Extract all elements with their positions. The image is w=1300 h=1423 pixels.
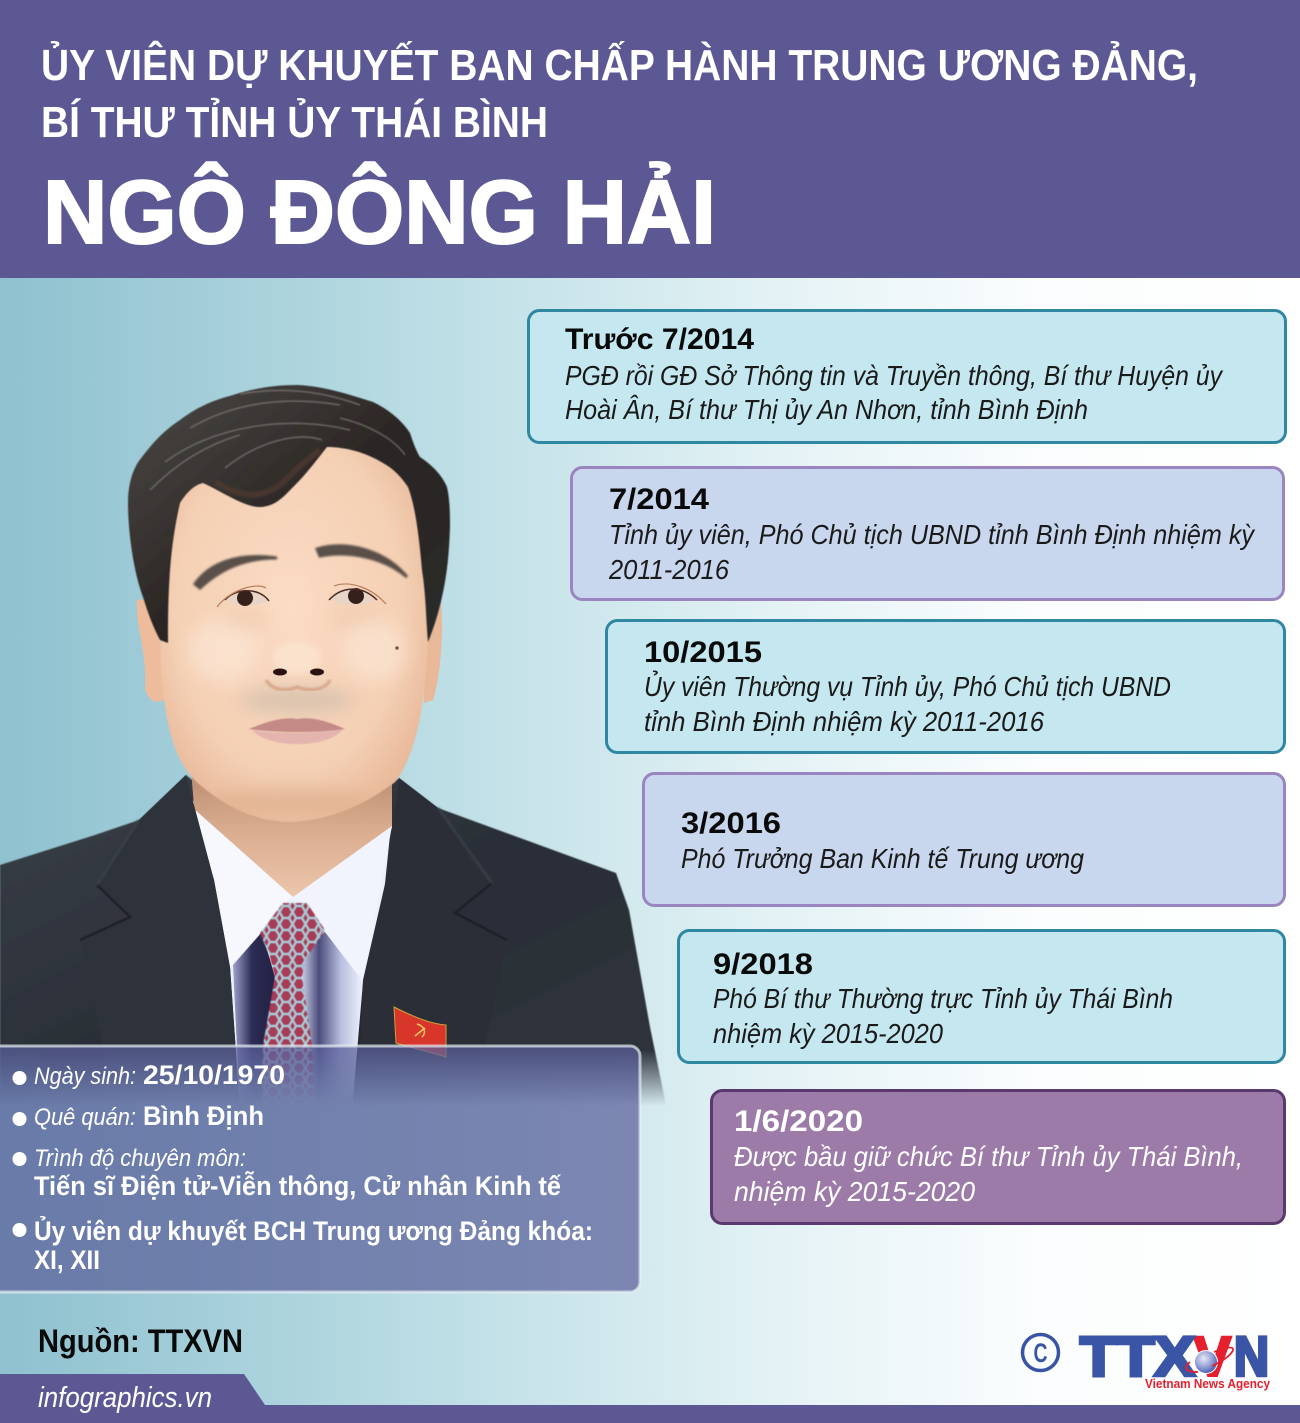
panel: 9/2018: Phó Bí thư Thường trực Tỉnh ủy Thái Bình xyxy=(713,983,1173,1014)
nose xyxy=(266,642,330,690)
logo: TTXVN: TTX xyxy=(1080,1324,1195,1388)
home town: Bình Định xyxy=(143,1101,264,1131)
face xyxy=(161,430,428,822)
lapels xyxy=(138,775,237,1064)
subtitle: BÍ THƯ TỈNH ỦY THÁI BÌNH xyxy=(41,96,548,147)
panel: 10/2015 xyxy=(606,620,1284,752)
party flag pin xyxy=(394,1007,446,1057)
shirt xyxy=(192,800,392,1110)
source credit: Nguồn: TTXVN xyxy=(38,1323,243,1359)
eyes xyxy=(217,584,386,607)
education: Trình độ chuyên môn: xyxy=(34,1145,246,1172)
panel: 3/2016 xyxy=(644,774,1284,906)
panel: 9/2018 xyxy=(678,930,1284,1062)
panel: before 7/2014 xyxy=(528,310,1286,442)
central committee term: Ủy viên dự khuyết BCH Trung ương Đảng khóa: xyxy=(34,1214,593,1246)
panel: 3/2016: 3/2016 xyxy=(681,807,781,840)
panel: 10/2015: tỉnh Bình Định nhiệm kỳ 2011-2016 xyxy=(644,706,1044,737)
facial shading xyxy=(188,610,405,814)
panel: before 7/2014: Hoài Ân, Bí thư Thị ủy An Nhơn, tỉnh Bình Định xyxy=(565,394,1088,425)
neck xyxy=(191,770,392,897)
panel: 1/6/2020: nhiệm kỳ 2015-2020 xyxy=(734,1176,975,1207)
home town xyxy=(12,1101,264,1131)
central committee term xyxy=(12,1214,593,1275)
education xyxy=(12,1145,562,1201)
necktie xyxy=(260,903,325,1110)
education: Tiến sĩ Điện tử-Viễn thông, Cử nhân Kinh tế xyxy=(34,1170,562,1201)
panel: 7/2014: 2011-2016 xyxy=(608,554,729,585)
portrait photo illustration xyxy=(0,385,667,1110)
copyright mark xyxy=(1022,1334,1058,1370)
mouth xyxy=(249,718,345,744)
home town: Quê quán: xyxy=(34,1104,136,1131)
panel: 1/6/2020: 1/6/2020 xyxy=(734,1105,863,1138)
panel: 1/6/2020 xyxy=(712,1090,1284,1224)
mole xyxy=(395,646,399,650)
jacket xyxy=(0,775,667,1110)
panel: 3/2016: Phó Trưởng Ban Kinh tế Trung ương xyxy=(681,843,1084,874)
panel: 7/2014: 7/2014 xyxy=(609,483,709,516)
panel: personal info xyxy=(0,1046,640,1292)
central committee term: XI, XII xyxy=(34,1245,100,1275)
panel: before 7/2014: PGĐ rồi GĐ Sở Thông tin và Truyền thông, Bí thư Huyện ủy xyxy=(565,360,1224,391)
footer band xyxy=(0,1374,1300,1423)
panel: 1/6/2020: Được bầu giữ chức Bí thư Tỉnh ủy Thái Bình, xyxy=(734,1141,1243,1172)
logo: TTXVN: V xyxy=(1194,1324,1231,1388)
logo: TTXVN: Vietnam News Agency xyxy=(1145,1376,1271,1391)
eyebrows xyxy=(195,546,407,588)
logo: TTXVN xyxy=(1080,1324,1271,1391)
header band xyxy=(0,0,1300,278)
birth date: Ngày sinh: xyxy=(34,1063,136,1090)
globe icon xyxy=(1186,1348,1233,1374)
birth date xyxy=(12,1060,285,1090)
panel: 7/2014 xyxy=(572,468,1284,600)
panel: before 7/2014: Trước 7/2014 xyxy=(565,323,754,356)
panel: 9/2018: 9/2018 xyxy=(713,948,813,981)
panel: 10/2015: Ủy viên Thường vụ Tỉnh ủy, Phó Chủ tịch UBND xyxy=(644,669,1171,702)
website label: infographics.vn xyxy=(38,1382,212,1414)
hair xyxy=(128,385,450,643)
name heading: NGÔ ĐÔNG HẢI xyxy=(43,161,716,263)
panel: 9/2018: nhiệm kỳ 2015-2020 xyxy=(713,1018,943,1049)
shirt collar xyxy=(193,808,293,967)
logo: TTXVN: N xyxy=(1234,1324,1269,1388)
panel: 10/2015: 10/2015 xyxy=(644,636,762,669)
copyright mark: C xyxy=(1034,1338,1048,1368)
ears xyxy=(137,599,166,702)
birth date: 25/10/1970 xyxy=(143,1060,285,1090)
